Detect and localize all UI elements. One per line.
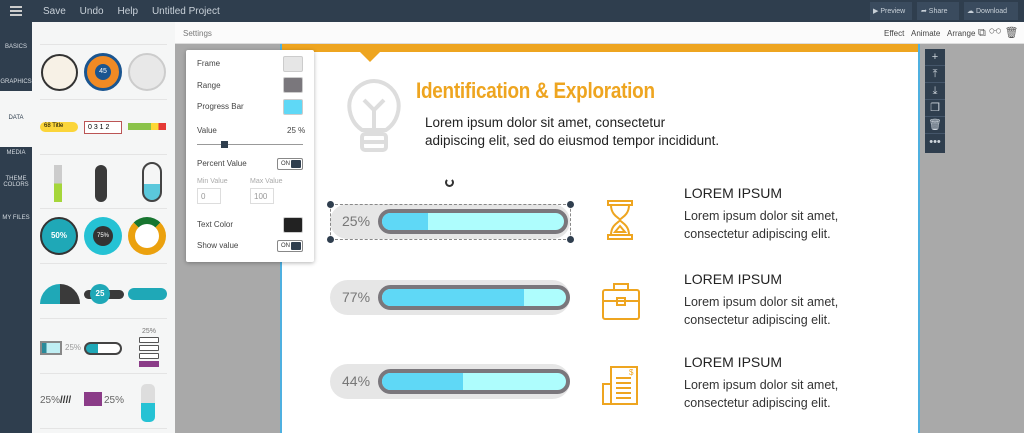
right toolbar: ⤒ [933, 68, 937, 80]
right toolbar: 🗑 [928, 119, 942, 131]
item 3 text: consectetur adipiscing elit. [684, 396, 831, 410]
panel: elements: 75% [97, 233, 109, 239]
title tag [40, 122, 78, 132]
item 1 text: LOREM IPSUM [684, 185, 782, 201]
item 2 text [684, 271, 838, 327]
panel: elements: 25% [65, 343, 81, 352]
left rail: MY FILES [2, 215, 30, 221]
panel: elements: 25% [142, 328, 156, 335]
selection box [330, 204, 571, 240]
left rail [0, 22, 32, 433]
left rail: MEDIA [6, 150, 26, 156]
buttons: ➦ Share [921, 8, 948, 15]
right toolbar [925, 49, 945, 153]
gauge [128, 53, 166, 91]
bar 2: 77% [342, 289, 370, 305]
bar 3: 44% [342, 373, 370, 389]
intro text: Lorem ipsum dolor sit amet, consectetur [425, 115, 665, 130]
item 2 text: Lorem ipsum dolor sit amet, [684, 295, 838, 309]
settings bar: Effect Animate Arrange [884, 29, 975, 38]
left rail: THEME [6, 176, 26, 182]
buttons: ▶ Preview [873, 8, 905, 15]
bar 2 [330, 280, 570, 315]
settings popup: 100 [254, 192, 267, 201]
donuts: 50% [51, 231, 67, 240]
item 3 text: LOREM IPSUM [684, 354, 782, 370]
settings popup: Progress Bar [197, 102, 244, 111]
buttons [870, 2, 1018, 20]
settings popup: 25 % [287, 126, 305, 135]
orange band [282, 44, 918, 52]
half gauge etc [40, 284, 80, 304]
right toolbar: ❐ [930, 102, 940, 114]
bar 3 [330, 364, 570, 399]
menu items: Save Undo Help Untitled Project [43, 6, 220, 17]
item 3 text: Lorem ipsum dolor sit amet, [684, 378, 838, 392]
icon: hourglass [607, 200, 633, 240]
right toolbar: ⤓ [933, 85, 937, 97]
canvas page [280, 44, 920, 433]
icon: briefcase [602, 283, 640, 320]
panel: elements: 25 [96, 289, 104, 298]
25% row: 25%//// [40, 395, 71, 406]
left rail: GRAPHICS [0, 79, 32, 85]
settings popup: ON [281, 161, 290, 167]
menu icon [10, 6, 22, 16]
right toolbar: + [932, 51, 938, 63]
left rail: DATA [8, 115, 24, 121]
dial 45 [84, 53, 122, 91]
intro text [425, 115, 719, 148]
settings bar: ⧉ ⚯ 🗑 [978, 27, 1018, 39]
panel: elements [32, 22, 175, 433]
bar 1: 25% [342, 213, 370, 229]
settings popup: Text Color [197, 220, 233, 229]
buttons: ☁ Download [967, 8, 1007, 15]
settings bar [175, 22, 1024, 44]
thermometers [54, 165, 62, 202]
item 2 text: LOREM IPSUM [684, 271, 782, 287]
icon: invoice: $ [629, 368, 634, 377]
clock [41, 54, 78, 91]
settings popup: Value [197, 126, 217, 135]
settings popup [186, 50, 314, 262]
settings popup: Frame [197, 59, 220, 68]
item 1 text: Lorem ipsum dolor sit amet, [684, 209, 838, 223]
settings popup: 0 [201, 192, 205, 201]
rotate icon [445, 178, 454, 187]
right toolbar: ••• [929, 136, 941, 148]
dial 45: 45 [99, 68, 107, 75]
settings popup: Range [197, 81, 221, 90]
donuts [40, 217, 78, 255]
top bar [0, 0, 1024, 22]
settings popup: Show value [197, 241, 238, 250]
settings popup: ON [281, 243, 290, 249]
battery [40, 341, 62, 355]
item 1 text: consectetur adipiscing elit. [684, 227, 831, 241]
settings popup: Min Value [197, 178, 228, 185]
title: Identification & Exploration [416, 78, 655, 103]
item 3 text [684, 354, 838, 410]
item 2 text: consectetur adipiscing elit. [684, 313, 831, 327]
icon: invoice [602, 366, 638, 405]
item 1 text [684, 185, 838, 241]
title tag: 68 Title [44, 123, 63, 129]
settings bar: Settings [183, 29, 212, 38]
bar 1 [330, 204, 570, 239]
intro text: adipiscing elit, sed do eiusmod tempor incididunt. [425, 133, 719, 148]
left rail: COLORS [3, 182, 29, 188]
panel: elements: 25% [104, 395, 124, 406]
settings popup: Percent Value [197, 159, 247, 168]
left rail: BASICS [5, 44, 27, 50]
panel: elements: 0 3 1 2 [88, 124, 109, 131]
icon: lightbulb [347, 79, 401, 152]
settings popup: Max Value [250, 178, 283, 185]
